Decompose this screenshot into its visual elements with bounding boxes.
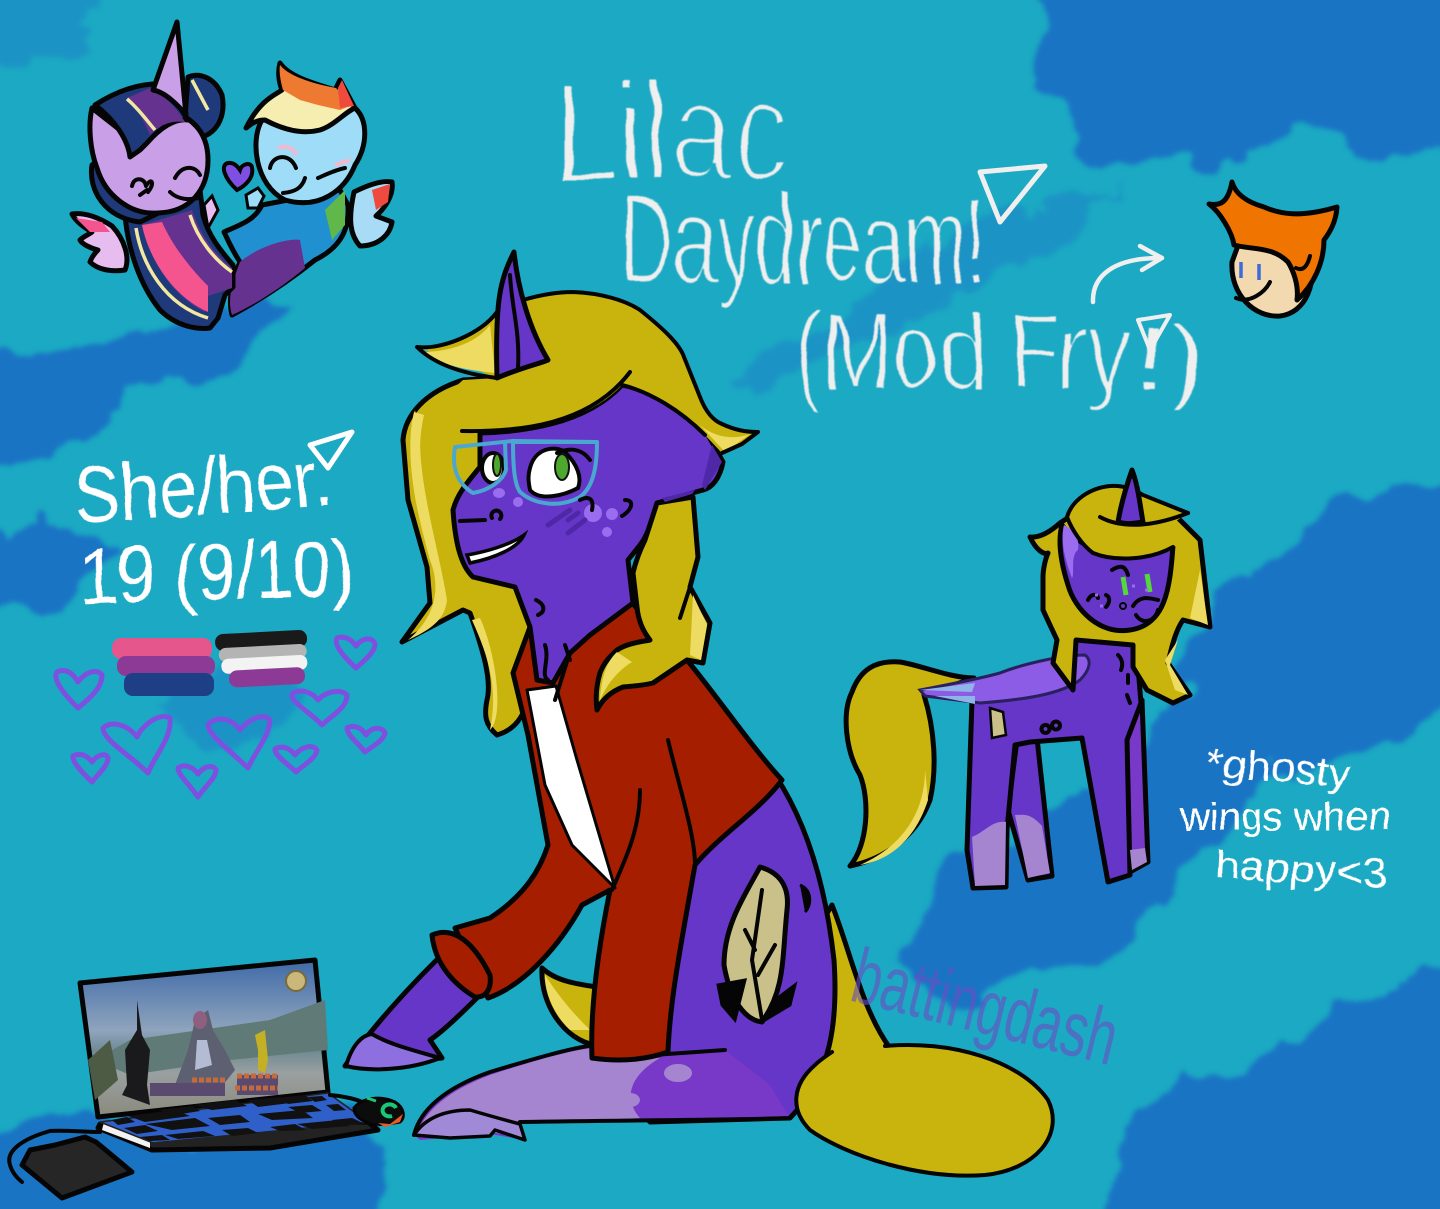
- side note: ghosty wings: happy<3: [1215, 843, 1389, 896]
- pronouns and age: [71, 432, 355, 621]
- pony: rainbow head: [256, 108, 365, 203]
- pronouns and age: She/her.: [71, 433, 335, 540]
- laptop: drawing tablet: [22, 1137, 132, 1198]
- small pony: face lines: [1088, 567, 1158, 621]
- laptop: gaming mouse: [354, 1098, 403, 1126]
- side note: ghosty wings: *ghosty: [1204, 740, 1352, 797]
- icon group: hugging ponies: [72, 22, 392, 328]
- small pony: cutie mark: [990, 708, 1006, 738]
- arrow to mod icon: [1093, 246, 1162, 302]
- title: Lilac Daydream: (Mod Fry: [795, 289, 1130, 414]
- main pony: top hair fill: [417, 292, 758, 480]
- pony: twilight bangs: [95, 84, 188, 157]
- main pony: tail tuft: [542, 968, 615, 1045]
- pony: twilight horn: [153, 22, 186, 115]
- main pony: right hair with front lock: [596, 497, 710, 710]
- main pony: left eye: [482, 453, 504, 483]
- jacket: cuff: [432, 932, 490, 997]
- small pony: [846, 470, 1210, 888]
- side note: ghosty wings: wings when: [1179, 795, 1390, 839]
- main pony: top hair shine: [422, 325, 750, 452]
- pony: rainbow hair: [246, 63, 355, 132]
- main pony: freckles: [493, 488, 618, 537]
- main pony: front leg: [345, 945, 490, 1069]
- watermark: battingdash: [844, 931, 1127, 1082]
- jacket: white shirt: [527, 686, 615, 888]
- pony: twilight body: [125, 190, 233, 328]
- pride flag: bisexual: [112, 638, 215, 696]
- main pony: hind leg lavender: [417, 1048, 660, 1137]
- pony: heart: [224, 163, 252, 190]
- title: Lilac Daydream: !): [1135, 302, 1207, 414]
- side note: ghosty wings: [1179, 740, 1390, 896]
- small pony: bangs: [1067, 486, 1195, 559]
- main pony: cutie mark feather: [718, 867, 810, 1022]
- main pony: front hoof: [346, 1034, 440, 1069]
- main pony: hind leg outline: [414, 1045, 790, 1135]
- small pony: wing: [920, 655, 1089, 703]
- main pony: face details: [454, 441, 722, 680]
- main pony: tail strand: [805, 905, 890, 1080]
- laptop: keys: [112, 1095, 365, 1141]
- laptop: yellow character: [255, 1030, 268, 1073]
- small pony: far legs: [1008, 738, 1052, 880]
- small pony: eyes: [1123, 574, 1150, 595]
- icon: mod Fry head: [1209, 182, 1337, 316]
- title: Lilac Daydream: Daydream!: [620, 169, 988, 312]
- main pony: ear detail: [662, 445, 722, 502]
- pony: twilight hair bun: [185, 75, 223, 136]
- small pony: back hair: [1030, 510, 1210, 703]
- main pony: glasses: [454, 441, 597, 504]
- main pony: mouth: [467, 535, 524, 563]
- hearts: [56, 637, 385, 797]
- small pony: leg socks: [972, 815, 1147, 886]
- small pony: tail: [846, 662, 974, 866]
- title: Lilac Daydream: [553, 53, 1207, 414]
- pronouns and age: 19 (9/10): [77, 522, 355, 621]
- pony: right wing: [351, 182, 392, 246]
- main pony: facial lines: [460, 450, 631, 680]
- pony: left wing: [72, 214, 127, 271]
- main pony: hair top over head: [410, 292, 758, 683]
- main pony: hoof: [414, 1110, 525, 1140]
- small pony: body: [967, 625, 1141, 888]
- main pony: hair highlight lower: [472, 618, 497, 730]
- main pony: tail blob: [796, 1041, 1053, 1176]
- laptop: dark character: [122, 1000, 150, 1105]
- main pony: purple body and haunch: [595, 775, 835, 1122]
- laptop: game scene: [95, 1000, 328, 1075]
- small pony: horn: [1118, 470, 1143, 524]
- main pony: back hair: [402, 378, 620, 735]
- pony: twilight face: [132, 168, 200, 199]
- laptop: base: [98, 1122, 378, 1150]
- main pony: red jacket: [432, 600, 782, 1060]
- main pony: hind leg: [414, 1045, 790, 1140]
- main pony: horn: [497, 252, 548, 378]
- title: Lilac Daydream: Lilac: [553, 53, 791, 210]
- jacket: folds: [555, 652, 695, 890]
- laptop: [9, 960, 403, 1198]
- main pony: neck and face: [453, 385, 723, 683]
- pony: rainbow body: [224, 190, 348, 315]
- main pony: top hair outline: [417, 292, 758, 453]
- pride flag: asexual: [215, 630, 309, 688]
- laptop: hotbar: [150, 1075, 278, 1096]
- pony: rainbow face: [270, 157, 345, 193]
- laptop: tablet cable: [9, 1131, 100, 1182]
- laptop: mouse cable: [330, 1095, 362, 1102]
- jacket: body and sleeve: [455, 600, 782, 1060]
- pony: hooves: [204, 196, 218, 228]
- main pony: hair highlight left: [408, 410, 447, 640]
- small pony: head: [1060, 525, 1173, 631]
- laptop: keyboard: [100, 1093, 368, 1143]
- pony: twilight head: [90, 108, 208, 213]
- pony: twilight hair back: [91, 150, 175, 222]
- main pony: right eye: [528, 449, 579, 496]
- main pony: left hair shine: [410, 412, 432, 540]
- laptop: minimap: [286, 971, 306, 991]
- laptop: armored character: [175, 1010, 235, 1095]
- laptop: screen: [80, 960, 328, 1117]
